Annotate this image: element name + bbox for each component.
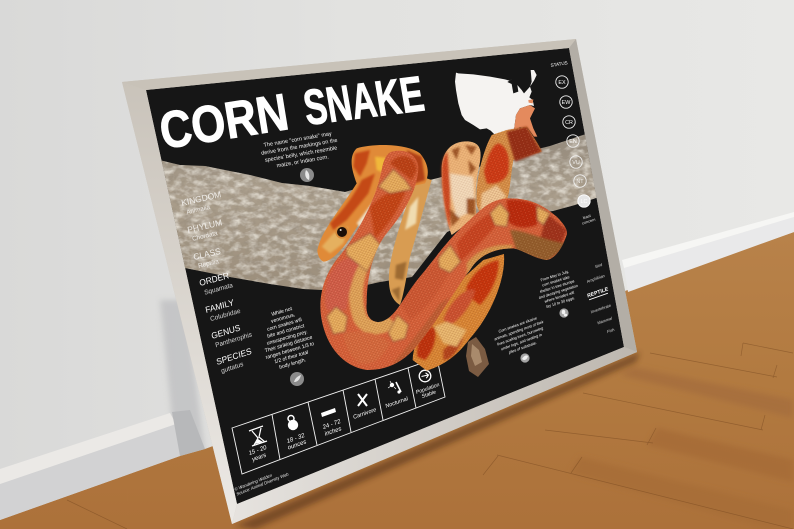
text block: habitat — [494, 317, 544, 355]
stat: weight: 18 - 32 — [286, 433, 306, 445]
title: CORN SNAKE: SNAKE — [299, 66, 428, 136]
corn snake — [310, 127, 577, 383]
icon: nocturnal — [388, 381, 401, 394]
text block: breeding — [538, 270, 578, 308]
stat: population: Population — [416, 382, 440, 396]
genus: Pantherophis — [215, 331, 253, 349]
text block: venom and strike: While not — [271, 306, 293, 318]
text block: venom and strike: bite and constrict — [267, 323, 305, 340]
species — [216, 348, 252, 374]
poster panel — [146, 48, 624, 504]
icon: corn — [300, 168, 314, 182]
species: SPECIES — [215, 346, 253, 367]
phylum: PHYLUM — [186, 217, 223, 235]
text block: breeding: lay 10 to 30 eggs. — [546, 296, 575, 309]
text block: habitat: piles of substrate. — [508, 341, 537, 355]
text block: venom and strike: body length. — [279, 357, 307, 371]
status circles — [556, 76, 590, 207]
snake: head and neck — [317, 145, 428, 262]
status scale: EN — [569, 139, 577, 145]
stat: diet: Carnivore — [353, 407, 377, 421]
stat: lifespan — [248, 426, 269, 464]
icon: kettlebell — [288, 416, 298, 430]
status scale: concern — [582, 217, 596, 226]
family — [206, 299, 240, 321]
background: baseboard left — [0, 410, 205, 520]
species: guttatus — [221, 361, 245, 375]
snake: pale vertical coil — [442, 141, 481, 235]
snake: pale midsection behind head — [389, 175, 432, 305]
family: FAMILY — [204, 297, 235, 315]
US range map — [455, 70, 537, 141]
stat: population — [416, 370, 440, 398]
genus: GENUS — [210, 322, 241, 341]
background: wall shadow beside frame — [160, 300, 205, 458]
text block: breeding: corn snakes take — [542, 275, 570, 288]
stat: diet — [353, 394, 377, 421]
icon: fork and knife — [358, 394, 367, 406]
class: Reptilia — [198, 258, 220, 270]
diet class list: Amphibian — [586, 273, 605, 284]
text block: breeding: and decaying vegetation — [538, 284, 578, 300]
text block: breeding: where females will — [544, 291, 575, 304]
text block: corn snake name: species' belly, which resemble — [264, 145, 338, 164]
stat: length: 24 - 72 — [322, 419, 342, 431]
status scale: least — [582, 213, 592, 220]
stat: weight — [287, 414, 306, 450]
text block: venom and strike: unsuspecting prey. — [266, 329, 308, 347]
diet class list: Invertebrate — [590, 302, 612, 315]
snake: lower back coil — [413, 254, 504, 371]
status scale: LC — [581, 199, 588, 205]
snake eye — [335, 225, 349, 239]
background: baseboard right — [622, 212, 794, 292]
phylum: Chordata — [192, 230, 219, 243]
frame shadow — [235, 352, 640, 529]
stat boxes — [232, 358, 445, 474]
kingdom: Animalia — [186, 204, 211, 216]
source credit: Source: Animal Diversity Web — [236, 471, 289, 497]
icon: eggs — [559, 308, 569, 318]
text block: habitat: animals, spending most of their — [494, 320, 545, 342]
stat: lifespan: years — [252, 453, 267, 463]
text block: corn snake name: derive from the markings on the — [261, 138, 338, 157]
icon: habitat — [520, 353, 530, 363]
class: CLASS — [192, 246, 222, 262]
icon: arrow in circle — [419, 370, 431, 382]
icon: strike — [290, 372, 304, 386]
genus — [212, 324, 252, 348]
text block: corn snake name: maize, or Indian corn. — [276, 154, 330, 169]
text block: corn snake name — [261, 132, 338, 168]
order: Squamata — [204, 282, 234, 297]
kingdom — [182, 191, 221, 214]
source credit: © Wandering Walden — [234, 472, 273, 492]
stat: activity: Nocturnal — [385, 396, 409, 410]
text block: venom and strike: corn snakes will — [267, 317, 302, 333]
stat: weight: ounces — [287, 439, 307, 452]
phylum — [188, 219, 222, 240]
status scale: CR — [565, 120, 573, 126]
diet class list: Mammal — [597, 315, 613, 326]
icon: ruler — [321, 408, 336, 417]
kingdom: KINGDOM — [180, 189, 222, 208]
text block: corn snake name: The name "corn snake" may — [263, 131, 333, 149]
stat: length: inches — [324, 426, 342, 438]
order — [200, 272, 234, 294]
diet class list: Fish — [607, 327, 615, 334]
status scale: VU — [572, 160, 580, 166]
body shading and belly — [325, 156, 570, 370]
stat: lifespan: 15 - 20 — [248, 445, 268, 457]
snake: front body — [310, 130, 577, 383]
saddle blotches — [327, 169, 550, 342]
diet class list: Bird — [595, 262, 603, 269]
selected class: reptile: REPTILE — [587, 286, 609, 300]
stat: activity — [385, 381, 409, 410]
stat: length — [321, 408, 342, 436]
title: CORN SNAKE: CORN — [156, 83, 292, 161]
text block: habitat: lives scaling trees, burrowing — [497, 326, 544, 347]
text block: venom and strike: venomous, — [271, 312, 296, 325]
status scale: EW — [562, 100, 571, 106]
class — [194, 248, 220, 268]
background: wooden floor — [0, 232, 794, 529]
text block: breeding: From May to July, — [540, 270, 569, 282]
status scale — [550, 60, 596, 226]
branch stub — [466, 337, 489, 377]
text block: venom and strike: ranges between 1/3 to — [265, 341, 315, 361]
order: ORDER — [198, 270, 230, 288]
poster frame — [122, 39, 637, 524]
title: CORN SNAKE — [161, 76, 426, 148]
snake: orange vertical coil — [476, 127, 542, 213]
text block: venom and strike: Their striking distance — [264, 335, 313, 354]
status scale: STATUS — [550, 60, 568, 68]
stat: population: Stable — [421, 389, 437, 400]
status scale: EX — [558, 80, 566, 86]
branch — [155, 132, 602, 291]
southeast range — [514, 99, 537, 137]
text block: habitat: Corn snakes are elusive — [498, 316, 537, 334]
text block: habitat: under logs, and nesting in — [501, 333, 542, 351]
family: Colubridae — [210, 308, 242, 323]
diet class list — [586, 262, 615, 334]
icon: hourglass — [249, 426, 267, 446]
text block: breeding: shelter in tree stumps — [539, 279, 575, 294]
text block: venom and strike — [264, 306, 314, 369]
text block: venom and strike: 1/2 of their total — [274, 350, 309, 365]
status scale: NT — [576, 179, 584, 185]
taxonomy list — [180, 189, 254, 376]
